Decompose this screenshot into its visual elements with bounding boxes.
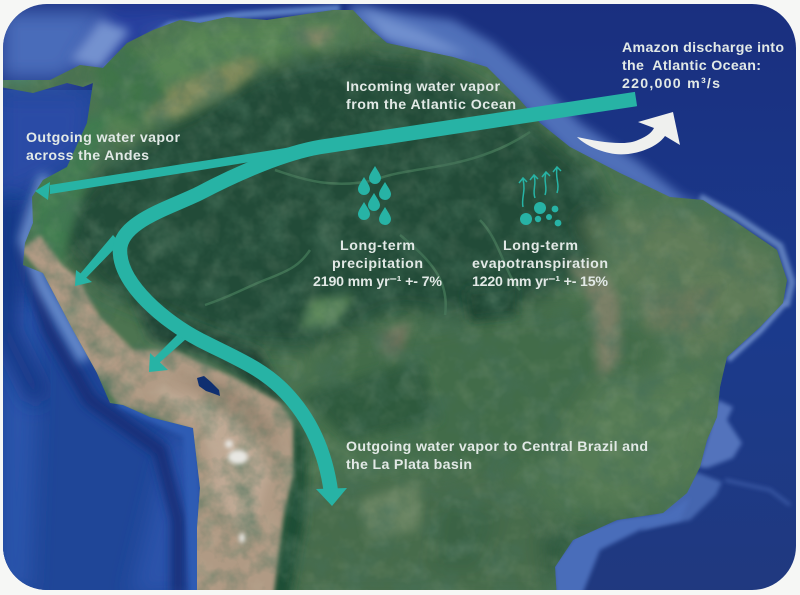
arrow: Amazon discharge: [577, 112, 680, 154]
text: long-term evapotranspiration: [472, 238, 608, 290]
icon: evapotranspiration: [519, 167, 561, 226]
text: outgoing across the Andes: [26, 130, 180, 164]
arrow: main incoming water vapor stream: [120, 99, 636, 506]
text: long-term evapotranspiration: 1220 mm yr⁻¹ +- 15%: [472, 274, 608, 290]
text: incoming water vapor: Incoming water vapor: [346, 79, 500, 95]
text: long-term evapotranspiration: Long-term: [503, 238, 578, 254]
text: outgoing to Central Brazil and La Plata: [346, 439, 648, 473]
Andes: [20, 235, 293, 595]
text: outgoing to Central Brazil and La Plata: Outgoing water vapor to Central Brazil and: [346, 439, 648, 455]
text: outgoing across the Andes: across the Andes: [26, 148, 149, 164]
text: Amazon discharge: [622, 40, 784, 92]
rivers: [205, 132, 530, 315]
text: Amazon discharge: the Atlantic Ocean:: [622, 58, 761, 74]
text: long-term evapotranspiration: evapotranspiration: [472, 256, 608, 272]
text: long-term precipitation: [313, 238, 442, 290]
lake Titicaca: [197, 376, 220, 396]
arrow: Bolivia branch: [149, 333, 186, 372]
salt flats: [225, 440, 248, 543]
icon: rain drops: [358, 166, 391, 225]
text: long-term precipitation: 2190 mm yr⁻¹ +- 7%: [313, 274, 442, 290]
text: long-term precipitation: Long-term: [340, 238, 415, 254]
text: long-term precipitation: precipitation: [332, 256, 423, 272]
text: outgoing to Central Brazil and La Plata: the La Plata basin: [346, 457, 472, 473]
text: Amazon discharge: Amazon discharge into: [622, 40, 784, 56]
arrow: Peru branch: [75, 235, 120, 286]
arrow: Andes branch: [35, 144, 310, 200]
text: incoming water vapor: [346, 79, 516, 113]
text: incoming water vapor: from the Atlantic Ocean: [346, 97, 516, 113]
text: Amazon discharge: 220,000 m³/s: [622, 76, 720, 92]
north-east shelf: [350, 4, 710, 205]
text: outgoing across the Andes: Outgoing water vapor: [26, 130, 180, 146]
